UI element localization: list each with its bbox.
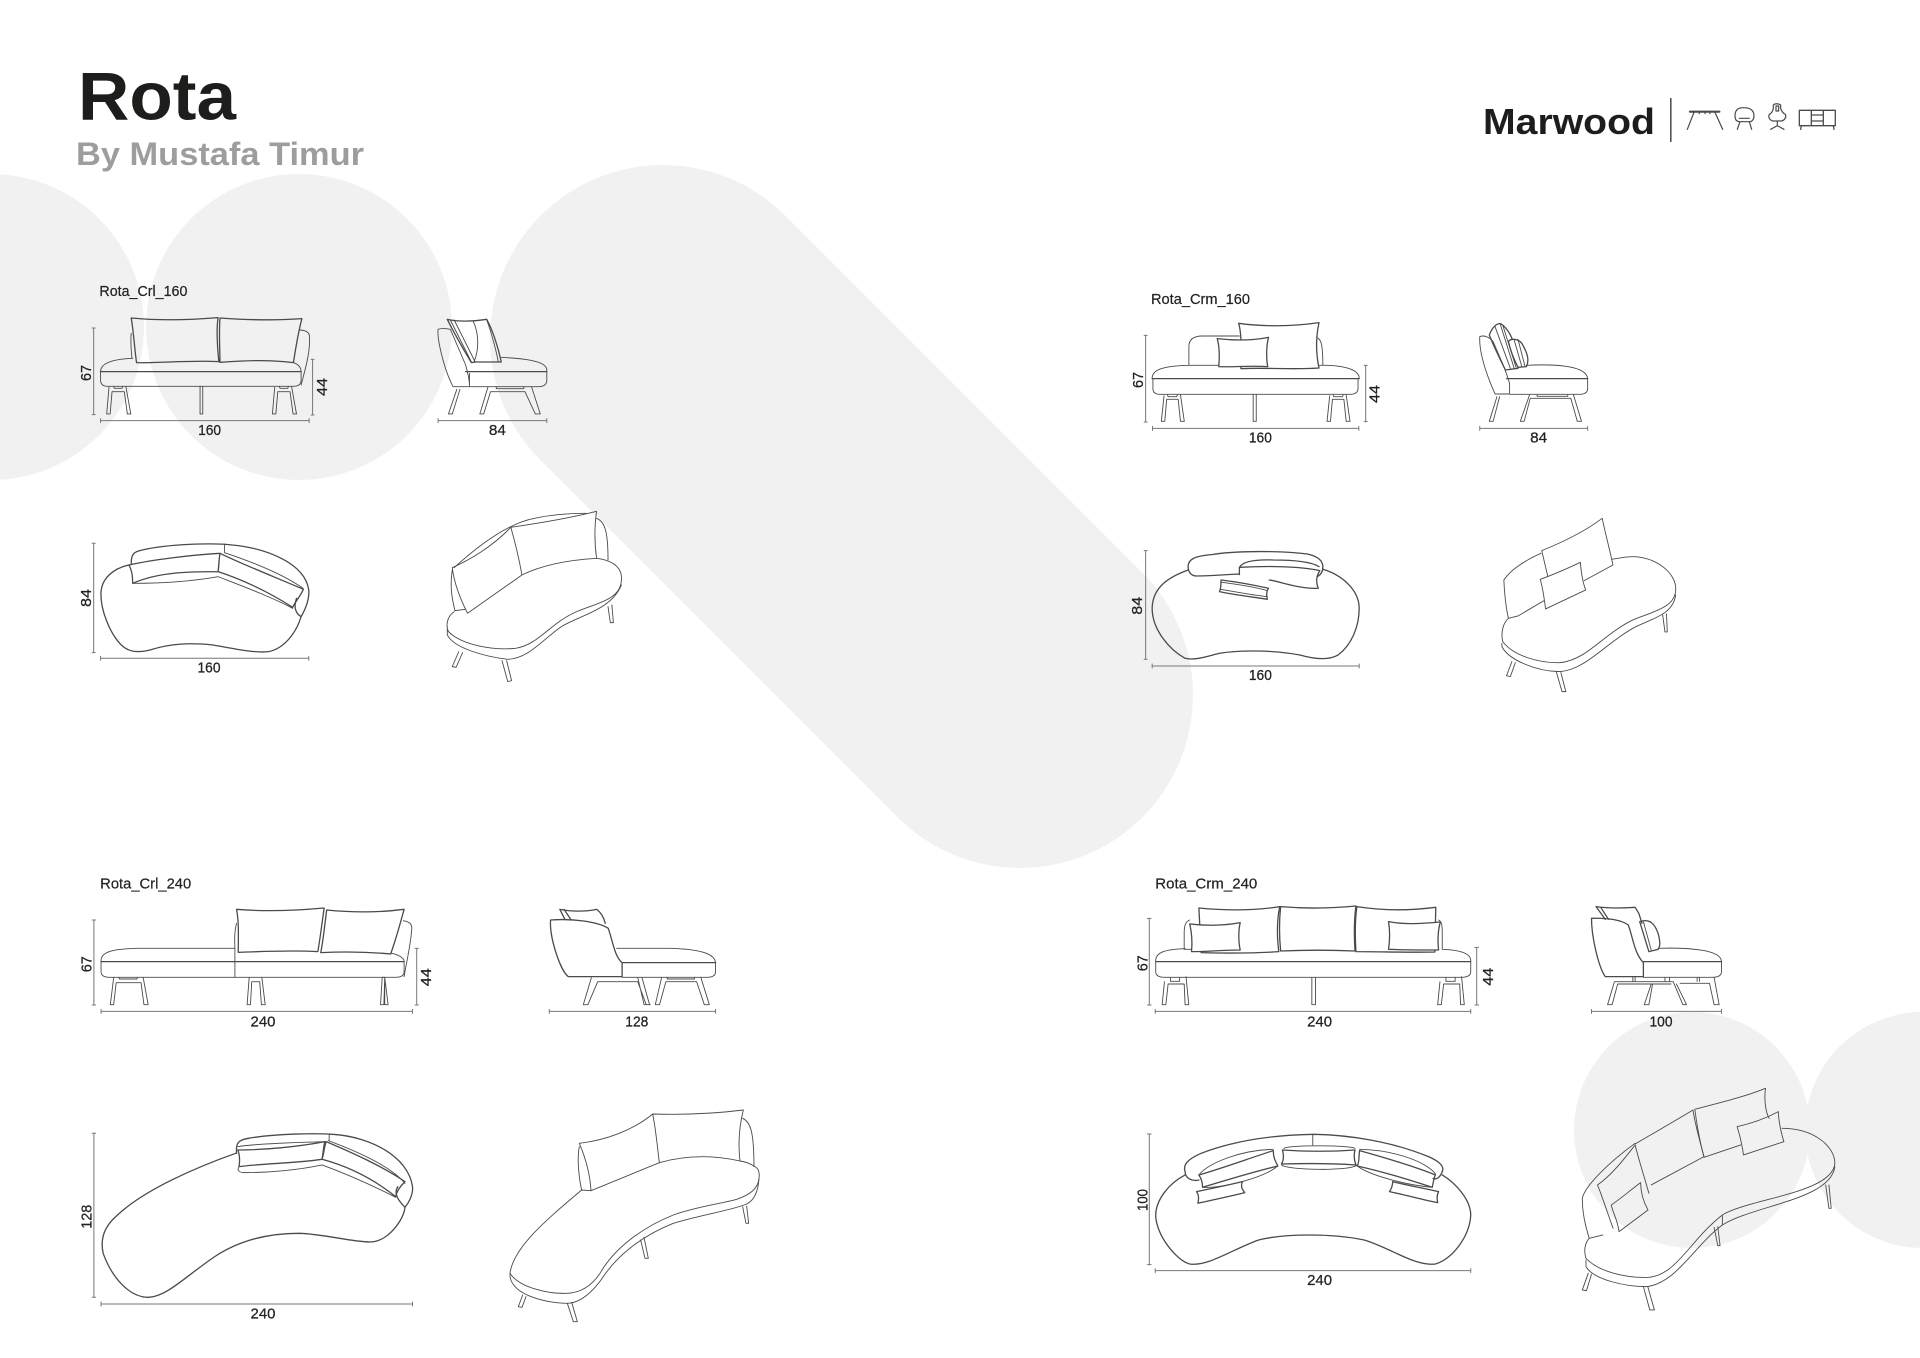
title: Rota	[78, 58, 237, 134]
dimension label: 67	[1130, 372, 1147, 388]
subtitle: By Mustafa Timur	[76, 136, 364, 172]
top view	[102, 1134, 413, 1297]
perspective view	[510, 1110, 759, 1322]
dimension label: 128	[625, 1014, 648, 1031]
furniture icons	[1687, 104, 1835, 129]
dimension label: 44	[418, 968, 435, 986]
perspective view	[447, 511, 622, 682]
side view	[1480, 323, 1588, 421]
top view	[101, 544, 309, 652]
brand name: Marwood	[1483, 101, 1655, 142]
panel: Rota_Crl_160	[78, 284, 622, 682]
dimension label: 240	[1307, 1272, 1332, 1289]
dimension label: 240	[1307, 1014, 1332, 1031]
logo divider	[1670, 98, 1672, 142]
side view	[550, 909, 716, 1005]
dimension label: 84	[489, 422, 506, 439]
dimension label: 67	[1134, 955, 1151, 971]
dimension label: 240	[250, 1305, 276, 1322]
panel: Rota_Crm_160	[1129, 292, 1676, 692]
model heading: Rota_Crm_240	[1155, 876, 1257, 892]
perspective view	[1582, 1088, 1835, 1310]
dimension label: 160	[198, 422, 221, 439]
dimension label: 160	[198, 660, 220, 677]
model heading: Rota_Crl_160	[99, 284, 187, 300]
icon: sideboard	[1799, 110, 1835, 129]
front view	[1152, 323, 1359, 421]
front view	[101, 318, 310, 414]
dimension lines	[92, 920, 716, 1306]
dimension label: 160	[1249, 429, 1272, 446]
brand logo	[1483, 98, 1835, 142]
front view	[1156, 906, 1471, 1005]
dimension label: 44	[314, 378, 331, 396]
front view	[101, 908, 412, 1005]
dimension label: 100	[1134, 1189, 1151, 1211]
dimension lines	[92, 328, 547, 660]
background shapes	[0, 174, 1920, 1248]
icon: armchair	[1735, 108, 1754, 129]
model heading: Rota_Crl_240	[100, 876, 191, 892]
dimension label: 67	[79, 956, 96, 972]
panel: Rota_Crl_240	[79, 876, 759, 1322]
dimension label: 160	[1249, 667, 1272, 684]
dimension label: 44	[1480, 968, 1497, 986]
dimension label: 100	[1650, 1014, 1672, 1031]
dimension label: 44	[1366, 385, 1384, 403]
side view	[1591, 907, 1721, 1005]
dimension label: 240	[250, 1014, 276, 1031]
side view	[438, 319, 547, 414]
top view	[1156, 1134, 1471, 1264]
icon: office chair	[1769, 104, 1786, 129]
dimension label: 84	[1530, 429, 1547, 446]
model heading: Rota_Crm_160	[1151, 292, 1250, 308]
dimension label: 84	[78, 589, 95, 607]
icon: table	[1687, 112, 1723, 129]
dimension lines	[1147, 918, 1721, 1273]
dimension label: 67	[78, 365, 95, 381]
top view	[1152, 552, 1359, 659]
dimension label: 84	[1129, 597, 1146, 615]
dimension label: 128	[79, 1205, 96, 1229]
panel: Rota_Crm_240	[1134, 876, 1835, 1310]
dimension lines	[1144, 335, 1588, 668]
perspective view	[1502, 518, 1676, 692]
